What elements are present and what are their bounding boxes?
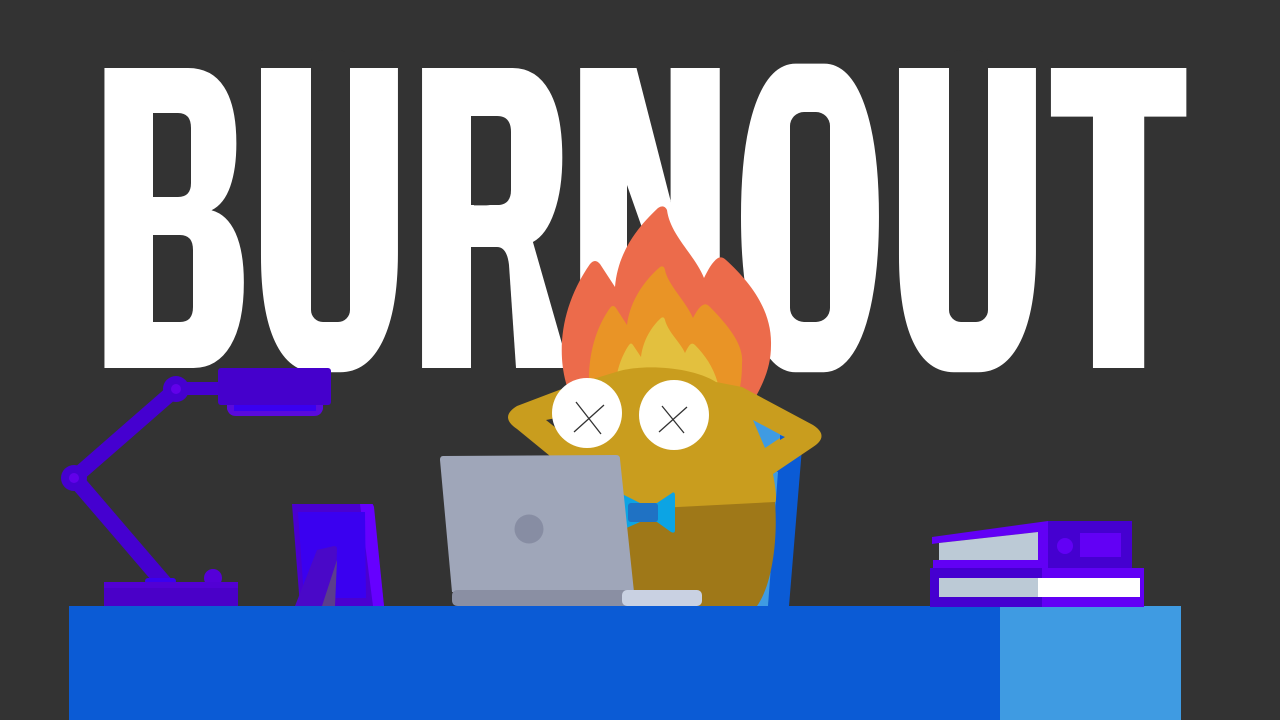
icon: flame [562,206,771,398]
laptop [440,455,702,606]
stack of books [930,521,1144,607]
left eye [552,378,622,448]
icon: bow tie [622,492,675,533]
arm gap [753,420,783,448]
picture frame [292,504,384,606]
chair [745,448,802,606]
desk [69,606,1181,720]
character body [508,367,822,606]
title [104,0,1176,462]
top book [932,521,1132,568]
desk lamp [61,368,331,606]
bottom book [930,568,1144,607]
right eye [639,380,709,450]
